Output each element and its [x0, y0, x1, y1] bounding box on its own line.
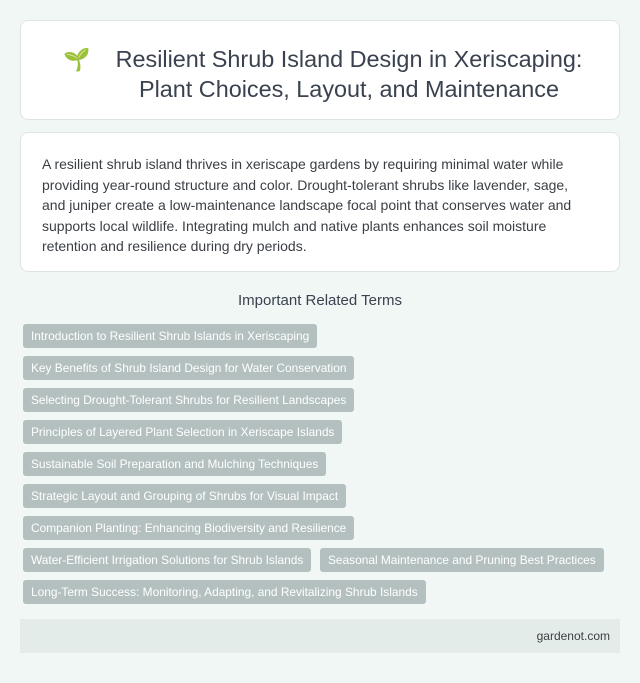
icon: seedling: 🌱 — [63, 47, 90, 72]
title card — [20, 20, 620, 120]
tag 5: Sustainable Soil Preparation and Mulching Techniques — [31, 457, 318, 471]
tag 7: Companion Planting: Enhancing Biodiversity and Resilience — [31, 521, 346, 535]
tag 3 — [23, 388, 354, 412]
tag 10: Long-Term Success: Monitoring, Adapting, and Revitalizing Shrub Islands — [31, 585, 418, 599]
footer text: gardenot.com — [537, 629, 610, 643]
tag 9: Seasonal Maintenance and Pruning Best Practices — [328, 553, 596, 567]
tag 1: Introduction to Resilient Shrub Islands in Xeriscaping — [31, 329, 309, 343]
tag 5 — [23, 452, 326, 476]
tag 8 — [23, 548, 311, 572]
tag 2: Key Benefits of Shrub Island Design for Water Conservation — [31, 361, 346, 375]
tag 8: Water-Efficient Irrigation Solutions for Shrub Islands — [31, 553, 303, 567]
description card — [20, 132, 620, 272]
title: Resilient Shrub Island Design in Xeriscaping: Plant Choices, Layout, and Maintenance — [116, 46, 582, 102]
description text: A resilient shrub island thrives in xeriscape gardens by requiring minimal water while providing year-round structure and color. Drought-tolerant shrubs like lavender, sage, and juniper create a low-maintenance landscape focal point that conserves water and supports local wildlife. Integrating mulch and native plants enhances soil moisture retention and resilience during dry periods. — [42, 156, 571, 254]
tag 6 — [23, 484, 346, 508]
heading: related terms: Important Related Terms — [238, 292, 402, 309]
tag 2 — [23, 356, 354, 380]
tag 4: Principles of Layered Plant Selection in Xeriscape Islands — [31, 425, 334, 439]
tag 3: Selecting Drought-Tolerant Shrubs for Resilient Landscapes — [31, 393, 346, 407]
tag 9 — [320, 548, 604, 572]
tag 6: Strategic Layout and Grouping of Shrubs for Visual Impact — [31, 489, 338, 503]
tag 7 — [23, 516, 354, 540]
tag 4 — [23, 420, 342, 444]
footer — [20, 619, 620, 653]
tag 10 — [23, 580, 426, 604]
tag 1 — [23, 324, 317, 348]
